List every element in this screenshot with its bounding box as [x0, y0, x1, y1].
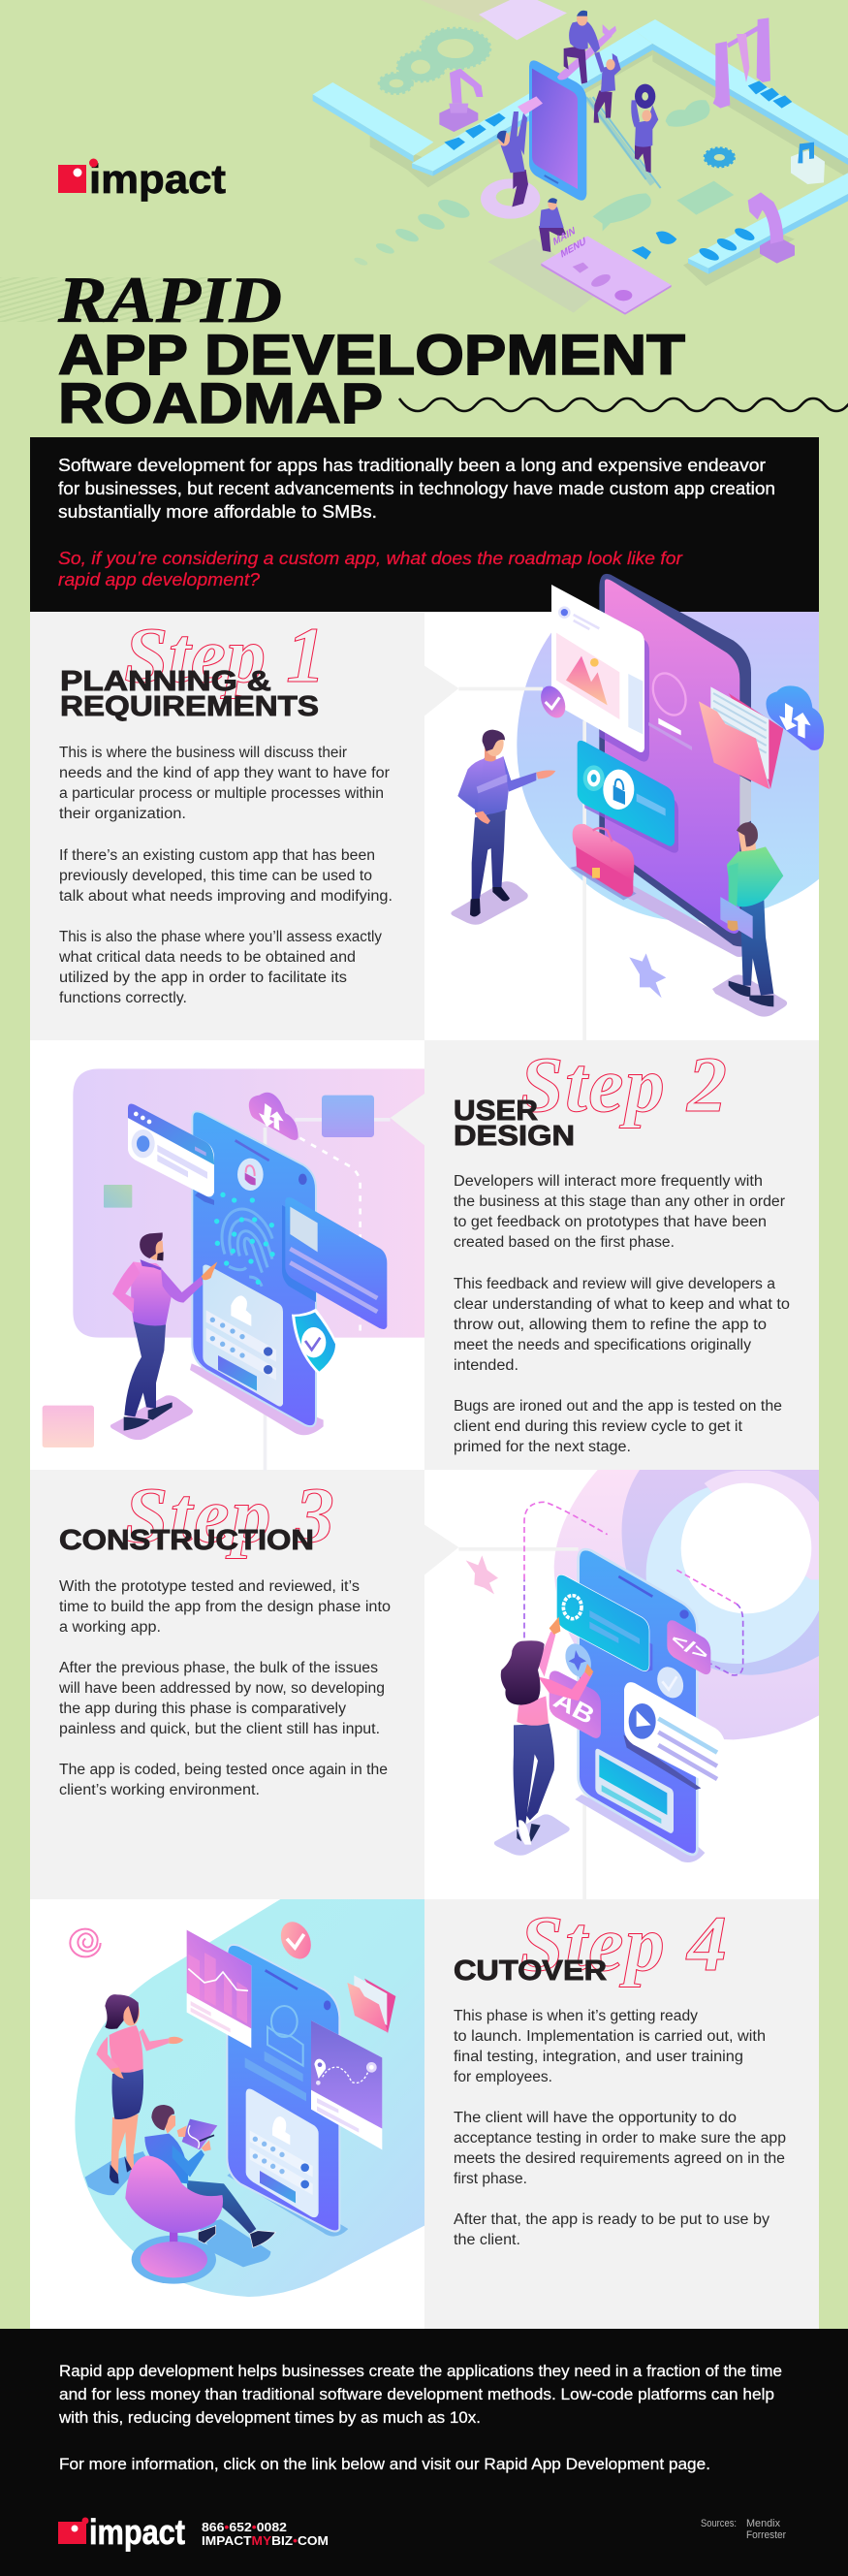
- panel text: step 4: [454, 1899, 786, 2248]
- title: RAPID: [57, 263, 282, 336]
- conveyor shadows: [370, 42, 848, 313]
- intro question: So, if you’re considering a custom app, what does the roadmap look like for: [58, 549, 683, 568]
- plate top: [417, 0, 567, 40]
- footer text: For more information, click on the link below and visit our Rapid App Development page.: [59, 2455, 710, 2473]
- big lilac gear: [481, 178, 540, 219]
- body copy: created based on the first phase.: [454, 1234, 675, 1251]
- man: [110, 1232, 217, 1440]
- body copy: client’s working environment.: [59, 1782, 260, 1798]
- body copy: If there’s an existing custom app that has been: [59, 847, 375, 864]
- login card: [246, 2089, 319, 2217]
- ladder: [586, 97, 661, 188]
- folder: [347, 1975, 395, 2033]
- step label: Step 3: [124, 1471, 334, 1559]
- spiral: [70, 1929, 101, 1956]
- body copy: will have been addressed by now, so developing: [58, 1680, 385, 1697]
- phone shadow: [570, 868, 749, 957]
- panel: intro: [30, 437, 819, 612]
- body copy: The app is coded, being tested once again in the: [59, 1762, 388, 1778]
- woman: [494, 1617, 593, 1856]
- body copy: This is where the business will discuss their: [59, 745, 347, 761]
- panel text: step 2: [454, 1040, 790, 1455]
- man 2: [712, 822, 787, 1017]
- check badge: [275, 1917, 317, 1964]
- AB card: [550, 1670, 601, 1738]
- worker on top: [564, 11, 600, 84]
- sources: Mendix: [746, 2518, 780, 2529]
- bottom card: [595, 1749, 674, 1833]
- map card: [311, 2020, 382, 2149]
- panel text: step 3: [58, 1471, 391, 1798]
- worker holding gear: [631, 84, 658, 173]
- robot arm left: [439, 69, 483, 132]
- body copy: talk about what needs improving and modifying.: [59, 888, 393, 905]
- connector: [424, 1525, 586, 1901]
- body copy: functions correctly.: [59, 990, 187, 1006]
- phone: [192, 1111, 316, 1426]
- star badge: [560, 1639, 596, 1681]
- body copy: The client will have the opportunity to do: [454, 2110, 737, 2126]
- footer logo: [58, 2512, 185, 2552]
- background rings: [554, 1470, 819, 1739]
- body copy: intended.: [454, 1357, 518, 1374]
- body copy: acceptance testing in order to make sure the app: [454, 2130, 786, 2147]
- title: ROADMAP: [58, 372, 383, 435]
- body copy: [454, 2008, 786, 2248]
- body copy: a particular process or multiple processes within: [59, 785, 384, 802]
- worker reaching: [594, 51, 621, 123]
- phone: [227, 1945, 339, 2231]
- intro question: [58, 549, 683, 589]
- step label: Step 4: [519, 1899, 727, 1988]
- fingerprint: [213, 1202, 286, 1294]
- panel: footer: [0, 2329, 848, 2576]
- footer text: Rapid app development helps businesses create the applications they need in a fraction of the time: [59, 2362, 782, 2380]
- image card: [551, 585, 649, 762]
- body copy: This is also the phase where you’ll assess exactly: [59, 929, 382, 945]
- shield: [292, 1309, 337, 1375]
- colour squares: [43, 1096, 374, 1447]
- star: [629, 953, 666, 998]
- heading: REQUIREMENTS: [60, 691, 319, 722]
- title: [57, 263, 685, 435]
- robot arm right: [748, 192, 795, 264]
- body copy: previously developed, this time can be used to: [59, 868, 372, 884]
- chart card: [187, 1930, 251, 2048]
- intro text: [58, 456, 775, 522]
- body copy: the client.: [454, 2232, 520, 2248]
- intro text: for businesses, but recent advancements in technology have made custom app creation: [58, 479, 775, 498]
- fingerprint dots: [214, 1193, 275, 1285]
- cloud: [766, 685, 824, 750]
- menu plate: MAIN: [552, 225, 576, 248]
- heading: DESIGN: [454, 1121, 575, 1152]
- body copy: Bugs are ironed out and the app is tested on the: [454, 1398, 782, 1415]
- illustration: step 4: [70, 1899, 424, 2297]
- check badge: [536, 683, 570, 721]
- body copy: for employees.: [454, 2069, 552, 2085]
- phone: [579, 1549, 697, 1855]
- body copy: [58, 745, 393, 1006]
- heading: PLANNING &: [60, 666, 271, 697]
- conveyor icons: [444, 80, 792, 263]
- body copy: to get feedback on prototypes that have been: [454, 1214, 767, 1230]
- heading: [60, 666, 319, 722]
- blue gear: [705, 148, 735, 167]
- intro question: rapid app development?: [58, 570, 260, 589]
- body copy: to launch. Implementation is carried out, with: [454, 2028, 766, 2045]
- footer text: with this, reducing development times by as much as 10x.: [58, 2408, 481, 2427]
- diagonal stripe band: [0, 277, 215, 322]
- profile card: [128, 1104, 214, 1205]
- body copy: meets the desired requirements agreed on in the: [454, 2150, 785, 2167]
- contact details: 866•652•0082: [202, 2520, 287, 2534]
- sources: Sources:: [701, 2518, 737, 2529]
- gear holes: [390, 39, 474, 87]
- body copy: first phase.: [454, 2171, 527, 2187]
- body copy: utilized by the app in order to facilitate its: [59, 970, 347, 986]
- dashed path: [524, 1502, 743, 1675]
- body copy: With the prototype tested and reviewed, it’s: [59, 1578, 360, 1595]
- footer logo: impact: [89, 2512, 185, 2552]
- dashed path: [284, 1138, 361, 1396]
- intro text: Software development for apps has traditionally been a long and expensive endeavor: [58, 456, 766, 475]
- faded chat, heart, mail icons: [353, 100, 734, 267]
- heading: [454, 1096, 575, 1152]
- body copy: Developers will interact more frequently with: [454, 1173, 763, 1190]
- contact details: IMPACTMYBIZ•COM: [202, 2533, 329, 2548]
- background circle: [517, 612, 819, 921]
- body copy: their organization.: [59, 806, 186, 822]
- briefcase: [570, 824, 637, 900]
- title: APP DEVELOPMENT: [58, 324, 685, 387]
- body copy: This phase is when it’s getting ready: [454, 2008, 698, 2024]
- card right: [282, 1197, 387, 1329]
- illustration: step 1: [424, 574, 824, 1042]
- body copy: painless and quick, but the client still has input.: [59, 1721, 380, 1737]
- sources: [701, 2518, 786, 2541]
- body copy: This feedback and review will give developers a: [454, 1276, 775, 1292]
- gantry robot: [713, 17, 770, 109]
- code tag card: </>: [668, 1629, 712, 1665]
- phone base: [190, 1363, 324, 1435]
- footer text: [58, 2362, 782, 2473]
- faded gears: [379, 28, 490, 93]
- sources: Forrester: [746, 2529, 786, 2541]
- body copy: After that, the app is ready to be put to use by: [454, 2211, 769, 2228]
- body copy: primed for the next stage.: [454, 1439, 631, 1455]
- header illustration: app factory: [313, 0, 848, 315]
- video card: [623, 1682, 725, 1792]
- ring and bar on phone: [646, 668, 692, 750]
- woman: [96, 1994, 183, 2183]
- heading: CUTOVER: [454, 1956, 607, 1987]
- logo: impact: impact: [89, 156, 226, 202]
- conveyors: [313, 19, 848, 274]
- worker with screw: [497, 96, 543, 207]
- heading: CONSTRUCTION: [59, 1525, 314, 1556]
- connector: [424, 666, 586, 1042]
- heading: USER: [454, 1096, 538, 1127]
- panel text: step 1: [58, 611, 393, 1006]
- body copy: a working app.: [59, 1619, 161, 1636]
- wavy line: [399, 398, 848, 411]
- settings card: [556, 1574, 652, 1671]
- body copy: time to build the app from the design phase into: [59, 1599, 391, 1615]
- body copy: meet the needs and specifications originally: [454, 1337, 751, 1353]
- illustration: step 3: [424, 1470, 819, 1901]
- folder: [699, 686, 783, 789]
- connector: [264, 1094, 424, 1471]
- body copy: final testing, integration, and user training: [454, 2049, 743, 2065]
- man 1: [451, 730, 555, 925]
- body copy: clear understanding of what to keep and what to: [454, 1296, 790, 1313]
- music box: [791, 143, 825, 184]
- cloud: [249, 1093, 298, 1140]
- lock card: [578, 741, 678, 853]
- body copy: what critical data needs to be obtained and: [58, 949, 356, 966]
- star: [466, 1555, 498, 1594]
- body copy: throw out, allowing them to refine the app to: [454, 1317, 767, 1333]
- illustration: step 2: [43, 1068, 424, 1471]
- login card: [203, 1264, 283, 1407]
- intro text: substantially more affordable to SMBs.: [58, 502, 377, 522]
- floor shadows: [85, 2151, 348, 2284]
- body copy: needs and the kind of app they want to have for: [59, 765, 390, 781]
- worker crouching: [539, 198, 566, 252]
- body copy: client end during this review cycle to get it: [454, 1418, 743, 1435]
- body copy: the business at this stage than any other in order: [454, 1193, 785, 1210]
- blob background: [75, 1899, 424, 2297]
- phone: [599, 574, 751, 946]
- phone base: [575, 1795, 705, 1862]
- check badge: [652, 1663, 688, 1702]
- contact details: [202, 2520, 329, 2548]
- body copy: the app during this phase is comparatively: [59, 1701, 346, 1717]
- phone: [529, 60, 586, 201]
- menu plate: MENU: [560, 236, 586, 261]
- body copy: [454, 1173, 790, 1455]
- AB card: AB: [550, 1686, 599, 1730]
- body copy: After the previous phase, the bulk of the issues: [59, 1660, 378, 1676]
- code tag card: [667, 1620, 712, 1674]
- step label: Step 1: [124, 611, 326, 699]
- man and chair: [125, 2105, 275, 2277]
- panel backgrounds: [30, 612, 819, 2329]
- step label: Step 2: [519, 1040, 727, 1129]
- body copy: [58, 1578, 391, 1798]
- lavender background: [73, 1068, 424, 1338]
- wrench: [557, 24, 616, 80]
- footer text: and for less money than traditional software development methods. Low-code platforms can help: [59, 2385, 774, 2403]
- menu plate: [541, 225, 672, 315]
